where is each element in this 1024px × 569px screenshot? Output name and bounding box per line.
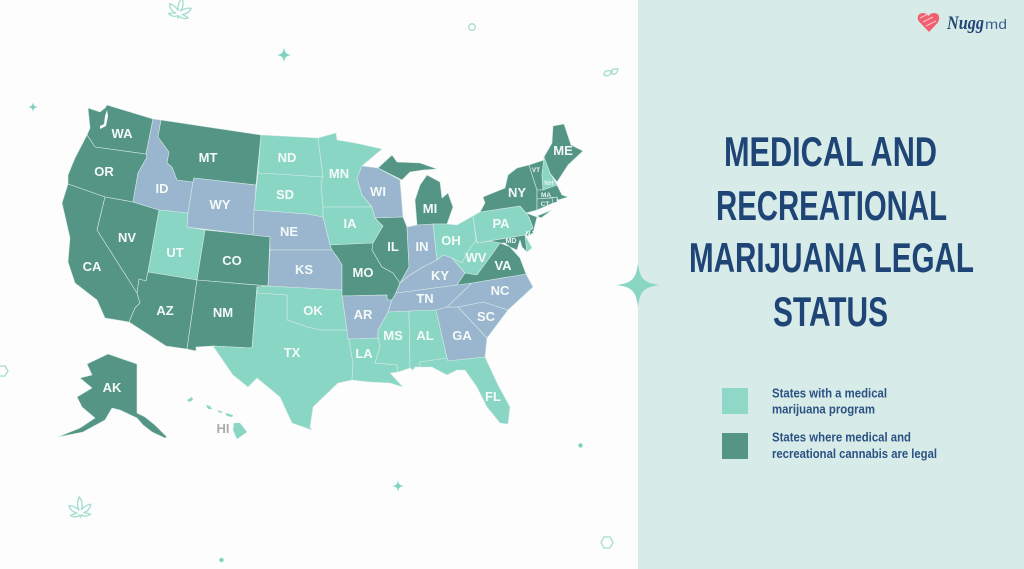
icon: dot right [578, 443, 583, 448]
state: Oregon [68, 135, 147, 202]
icon: hexagon left [0, 366, 8, 376]
state: Kentucky: KY [431, 268, 449, 283]
state: North Dakota: ND [278, 150, 296, 165]
logo [918, 13, 1007, 34]
state: Mississippi [375, 311, 410, 372]
icon: sparkle top [277, 47, 291, 62]
state: Missouri: MO [353, 265, 373, 280]
state: Tennessee: TN [416, 291, 434, 306]
state: Iowa: IA [344, 216, 357, 231]
state: Montana: MT [199, 150, 217, 165]
state: New Jersey [525, 213, 537, 238]
state: South Carolina: SC [477, 309, 496, 324]
state: Vermont [529, 160, 544, 190]
state: Oregon: OR [94, 164, 114, 179]
panel: map background [0, 0, 638, 569]
state: Iowa [323, 207, 383, 245]
icon: large sparkle [616, 263, 660, 307]
icon: hexagon bottom [601, 537, 613, 548]
state: Mississippi: MS [383, 328, 403, 343]
state: North Carolina: NC [491, 283, 510, 298]
state: Indiana [400, 224, 437, 283]
legend text: medical and recreational [772, 430, 937, 461]
state: Washington: WA [112, 126, 133, 141]
state: North Dakota [258, 135, 323, 177]
state: Pennsylvania: PA [492, 216, 510, 231]
state: Texas: TX [284, 345, 301, 360]
state: Maryland [477, 235, 527, 252]
state: California: CA [83, 259, 102, 274]
state: Colorado: CO [222, 253, 242, 268]
logo: md [985, 16, 1007, 32]
state: Hawaii: HI [216, 421, 230, 436]
legend text: medical: States with a medical [772, 386, 887, 400]
state: Alabama [409, 310, 447, 370]
map: United States legal status [58, 105, 583, 439]
state: Illinois [372, 217, 409, 283]
state: Maryland: MD [506, 238, 516, 245]
state: Wyoming [187, 178, 256, 235]
state: Nebraska [253, 210, 332, 250]
state: Delaware [525, 235, 532, 252]
panel: title and legend background [638, 0, 1024, 569]
state: Virginia: VA [494, 258, 512, 273]
state: Tennessee [388, 283, 472, 312]
state: Illinois: IL [387, 239, 399, 254]
state: Nevada: NV [118, 230, 136, 245]
state: Texas [213, 287, 353, 430]
state: Wisconsin: WI [370, 184, 386, 199]
state: Ohio [433, 216, 476, 263]
state: Virginia [457, 243, 526, 285]
state: Maine: ME [553, 143, 573, 158]
legend text: medical [772, 386, 887, 416]
logo text: Nugg [946, 13, 984, 34]
title: STATUS [773, 288, 888, 335]
state: Wyoming: WY [210, 197, 231, 212]
state: Idaho: ID [156, 181, 168, 196]
state: Hawaii [187, 397, 247, 439]
state: Washington [87, 105, 153, 154]
state: Kentucky [396, 255, 465, 293]
state: Idaho [133, 119, 193, 213]
state: Arkansas: AR [354, 307, 373, 322]
state: North Carolina [447, 274, 533, 310]
state: Utah: UT [166, 245, 184, 260]
state: Alaska [58, 354, 167, 438]
state: Indiana: IN [416, 239, 428, 254]
state: Montana [158, 120, 261, 185]
state: Florida: FL [485, 389, 501, 404]
legend swatch: medical [722, 388, 748, 414]
icon: sparkle bottom [392, 480, 404, 492]
state: Georgia: GA [452, 328, 472, 343]
state: Kansas [268, 250, 342, 290]
state: Oklahoma [257, 286, 347, 330]
state: Minnesota: MN [329, 166, 349, 181]
state: Louisiana [348, 338, 403, 387]
state: Louisiana: LA [355, 346, 373, 361]
state: West Virginia [452, 240, 500, 275]
state: Florida [420, 357, 510, 424]
state: New Hampshire: NH [544, 180, 554, 187]
decorative icons [0, 0, 618, 548]
state: New York [480, 165, 552, 218]
icon: leaf bottom [68, 496, 92, 518]
state: New Hampshire [542, 157, 557, 190]
legend [722, 386, 937, 461]
state: Utah [148, 210, 205, 280]
icon: sparkle left [28, 102, 38, 112]
state: Kansas: KS [295, 262, 313, 277]
title [689, 128, 974, 335]
state: New Jersey: NJ [526, 231, 535, 238]
state: Wisconsin [357, 166, 403, 218]
state: New Mexico: NM [213, 305, 233, 320]
state: Connecticut [537, 198, 553, 210]
legend text: medical: marijuana program [772, 402, 875, 416]
state: Oklahoma: OK [303, 303, 323, 318]
icon: dot bottom [219, 558, 224, 562]
legend swatch: medical and recreational [722, 433, 748, 459]
state: Nebraska: NE [280, 224, 298, 239]
state: Nevada [97, 197, 159, 293]
state: Massachusetts: MA [541, 192, 551, 199]
state: Arkansas [342, 295, 392, 339]
state: Georgia [436, 307, 487, 361]
state: Pennsylvania [473, 206, 533, 243]
state: Missouri [330, 243, 400, 300]
state: California [62, 184, 140, 322]
state: Maine [544, 124, 583, 182]
state: Rhode Island [552, 197, 557, 203]
state: Ohio: OH [441, 233, 461, 248]
state: South Dakota [254, 173, 323, 217]
state: West Virginia: WV [466, 250, 487, 265]
state: Connecticut: CT [541, 201, 549, 208]
state: Colorado [197, 230, 270, 286]
state: Alabama: AL [416, 328, 434, 343]
icon: ring [469, 24, 475, 30]
icon: heart [918, 13, 939, 32]
icon: small leaf right [604, 69, 618, 76]
legend text: medical and recreational: States where medical and [772, 430, 911, 444]
state: New York: NY [508, 185, 526, 200]
state: Minnesota [318, 133, 382, 207]
state: Vermont: VT [532, 167, 540, 174]
state: Arizona: AZ [156, 303, 174, 318]
state: Alaska: AK [103, 380, 122, 395]
state: South Dakota: SD [276, 187, 294, 202]
state: South Carolina [458, 302, 508, 338]
state: Arizona [129, 272, 197, 349]
legend text: medical and recreational: recreational cannabis are legal [772, 446, 937, 461]
state: Massachusetts [537, 185, 568, 200]
state: Michigan [378, 155, 453, 225]
icon: leaf top [167, 0, 193, 20]
state: New Mexico [187, 280, 268, 351]
title: MEDICAL AND [724, 128, 937, 175]
state: Michigan: MI [423, 201, 437, 216]
